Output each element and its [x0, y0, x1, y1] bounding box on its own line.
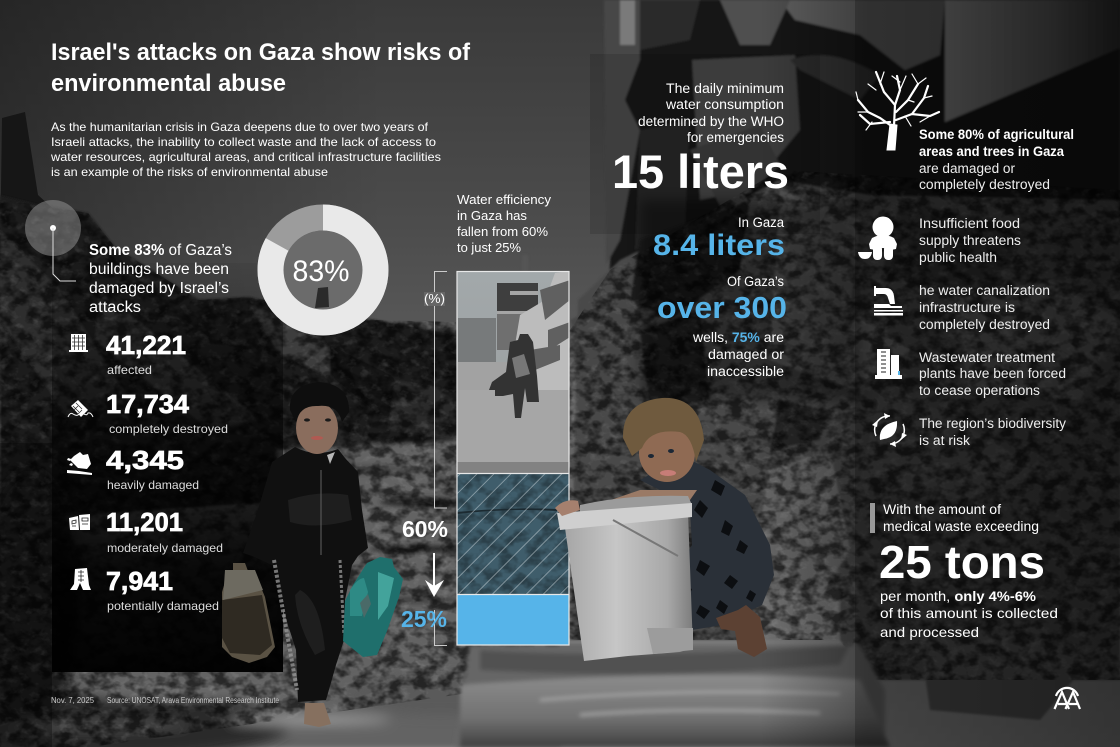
intro text: Israeli attacks, the inability to collect waste and the lack of access to: [51, 135, 436, 149]
footer date and source: Nov. 7, 2025: [51, 696, 95, 705]
wastewater item: [875, 349, 1066, 398]
collapsed buildings upper right: [604, 0, 1120, 270]
medical waste block: of this amount is collected: [880, 605, 1058, 621]
medical waste block: [870, 502, 1058, 640]
agriculture item: areas and trees in Gaza: [919, 144, 1064, 159]
bucket: [557, 496, 693, 661]
medical waste block: per month, only 4%-6%: [880, 588, 1037, 604]
icon: dead tree: [856, 72, 939, 150]
stat: heavily damaged: [67, 445, 199, 492]
agriculture item: [856, 72, 1074, 192]
stat: affected: [69, 330, 186, 377]
icon: moderately damaged building: [69, 514, 90, 530]
arrow down: [425, 553, 444, 597]
wells statistics: damaged or: [708, 347, 785, 362]
icon: office building: [69, 334, 88, 352]
ruined tower at far left: [0, 112, 60, 260]
glass bottle: [222, 563, 275, 663]
stat: moderately damaged: [69, 507, 223, 555]
Gaza 8.4 liters: 8.4 liters: [653, 229, 785, 262]
head: [639, 424, 695, 482]
rubble texture: [0, 172, 1120, 747]
WHO minimum water text: The daily minimum: [666, 81, 784, 96]
icon: hunched person with bowl: [858, 216, 897, 260]
biodiversity item: [872, 413, 1066, 448]
dress: [640, 456, 774, 632]
horse cart: [489, 334, 539, 418]
canalization item: [874, 283, 1050, 332]
icon: drain pipe: [874, 286, 903, 316]
wells statistics: inaccessible: [707, 364, 784, 379]
buildings damaged statement: buildings have been: [89, 261, 229, 278]
medical waste block: 25 tons: [879, 536, 1045, 588]
stat: potentially damaged: potentially damaged: [107, 599, 219, 613]
agriculture item: are damaged or: [919, 161, 1016, 176]
food item: [858, 216, 1021, 265]
donut chart 83%: [270, 218, 376, 322]
water efficiency text: in Gaza has: [457, 209, 527, 223]
green jug: [343, 557, 403, 657]
legs: [716, 605, 767, 657]
water efficiency text: fallen from 60%: [457, 225, 548, 239]
label 60%: 60%: [402, 516, 448, 542]
canalization item: he water canalization: [919, 283, 1050, 298]
photo: boy carrying containers: [222, 382, 403, 727]
stat: completely destroyed: completely destroyed: [109, 422, 228, 436]
percent scale bracket: (%): [424, 292, 445, 306]
WHO minimum water text: for emergencies: [687, 130, 784, 145]
WHO minimum water text: [638, 81, 784, 145]
stat: completely destroyed: [68, 389, 228, 436]
water efficiency bar chart: [457, 271, 570, 645]
icon: heavily damaged building: [67, 452, 92, 475]
water efficiency text: to just 25%: [457, 241, 521, 255]
ground: [0, 440, 600, 747]
intro text: is an example of the risks of environmental abuse: [51, 165, 328, 179]
head: [296, 402, 338, 454]
water efficiency text: [457, 193, 552, 255]
intro text: water resources, agricultural areas, and critical infrastructure facilities: [50, 150, 441, 164]
agriculture item: completely destroyed: [919, 177, 1050, 192]
wells statistics: wells, 75% are: [692, 330, 784, 345]
biodiversity item: is at risk: [919, 433, 970, 448]
logo: Anadolu Agency: [1054, 688, 1080, 709]
photo: girl hugging bucket: [555, 398, 774, 661]
buildings damaged statement: damaged by Israel’s: [89, 280, 229, 297]
wastewater item: Wastewater treatment: [919, 350, 1055, 365]
WHO minimum water text: water consumption: [665, 97, 784, 112]
right rubble field: [570, 180, 1120, 720]
biodiversity item: The region’s biodiversity: [919, 416, 1066, 431]
stat: heavily damaged: heavily damaged: [107, 478, 199, 492]
wells statistics: [657, 274, 787, 379]
Gaza 8.4 liters: In Gaza: [738, 215, 784, 230]
food item: supply threatens: [919, 233, 1021, 248]
title: Israel's attacks on Gaza show risks of: [51, 39, 471, 66]
canalization item: infrastructure is: [919, 300, 1015, 315]
medical waste block: With the amount of: [883, 502, 1001, 517]
medical waste block: medical waste exceeding: [883, 519, 1039, 534]
bare foot: [304, 703, 331, 727]
food item: Insufficient food: [919, 216, 1020, 231]
stat: affected: affected: [107, 363, 152, 377]
jacket and trousers: [243, 447, 368, 702]
bar: hatched 35% segment: [457, 474, 569, 595]
buildings damaged statement: [89, 242, 232, 316]
canalization item: completely destroyed: [919, 317, 1050, 332]
distant buildings: [395, 255, 528, 390]
icon: potentially damaged building: [70, 568, 91, 590]
wastewater item: to cease operations: [919, 383, 1040, 398]
footer date and source: Source: UNOSAT, Arava Environmental Research Institute: [107, 696, 279, 705]
footer date and source: [51, 696, 279, 705]
magnifier callout: [25, 200, 81, 281]
title: environmental abuse: [51, 70, 286, 97]
stat: potentially damaged: 7,941: [106, 566, 173, 596]
food item: public health: [919, 250, 997, 265]
donut chart 83%: 83%: [292, 255, 350, 288]
icon: treatment plant: [875, 349, 902, 379]
percent scale bracket: [424, 272, 447, 646]
stat: moderately damaged: moderately damaged: [107, 541, 223, 555]
left rubble mound: [0, 195, 470, 520]
bar: blue 25% segment: [457, 595, 569, 645]
stat: completely destroyed: 17,734: [106, 389, 190, 419]
intro text: [50, 120, 441, 179]
WHO minimum water text: determined by the WHO: [638, 114, 784, 129]
icon: collapsed building: [68, 400, 93, 417]
stat: heavily damaged: 4,345: [106, 445, 184, 475]
puddle in foreground: [455, 645, 890, 747]
agriculture item: Some 80% of agricultural: [919, 127, 1074, 142]
label 25%: 25%: [401, 606, 447, 632]
buildings damaged statement: attacks: [89, 299, 141, 316]
wells statistics: Of Gaza’s: [727, 274, 784, 289]
title: [51, 39, 471, 97]
arm: [605, 490, 697, 510]
wastewater item: plants have been forced: [919, 366, 1066, 381]
stat: moderately damaged: 11,201: [106, 507, 183, 537]
icon: leaf in cycle: [872, 413, 907, 447]
stat: affected: 41,221: [106, 330, 186, 360]
medical waste block: and processed: [880, 624, 979, 640]
water efficiency text: Water efficiency: [457, 193, 552, 207]
bar photo: top section: [457, 271, 570, 474]
Gaza 8.4 liters: [653, 215, 785, 262]
hand on rim: [555, 500, 580, 516]
wells statistics: over 300: [657, 290, 787, 325]
stat: potentially damaged: [70, 566, 219, 613]
15 liters figure: 15 liters: [612, 145, 789, 198]
buildings damaged statement: Some 83% of Gaza’s: [89, 242, 232, 259]
intro text: As the humanitarian crisis in Gaza deepens due to over two years of: [51, 120, 429, 134]
